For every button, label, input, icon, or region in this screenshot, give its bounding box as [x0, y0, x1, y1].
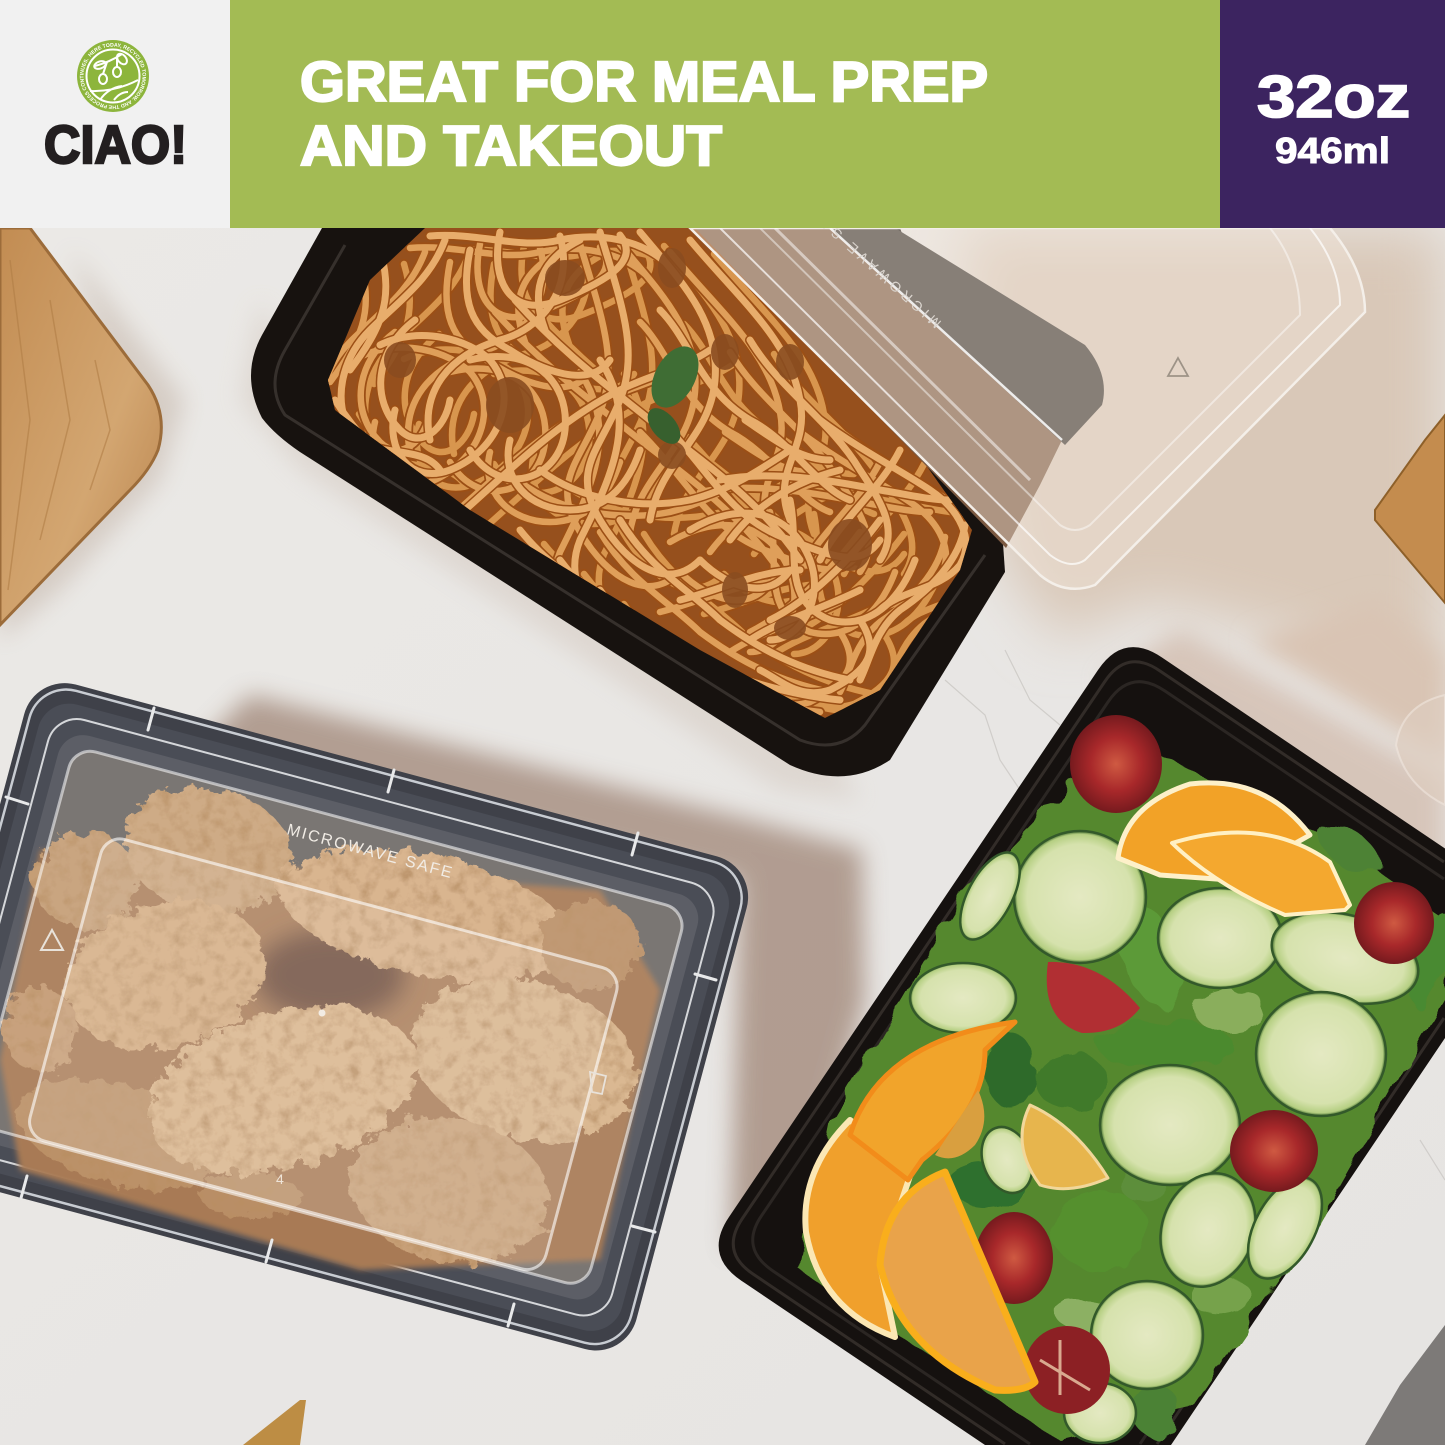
header band [0, 0, 1445, 228]
lid embossed text: MICROWAVE SAFE [285, 821, 454, 882]
heading line 1: GREAT FOR MEAL PREP [300, 50, 988, 114]
brand wordmark: CIAO! [44, 115, 187, 175]
tomato halves [975, 715, 1434, 1414]
clear lid [0, 708, 716, 1326]
mint leaves [648, 346, 698, 444]
rim clips [6, 708, 716, 1326]
black tray [719, 647, 1445, 1445]
clear cup at right edge [1396, 695, 1445, 805]
spaghetti [315, 228, 990, 718]
pasta seen through lid [695, 228, 1062, 548]
recycle mark [41, 930, 63, 950]
mould number: 4 [276, 1171, 284, 1187]
grey cloth [1365, 1325, 1445, 1445]
panel: headline [230, 0, 1220, 228]
recycle mark on lid [1168, 358, 1188, 376]
gold knife handle [243, 1400, 306, 1445]
heading line 2: AND TAKEOUT [300, 114, 722, 178]
panel: logo [0, 0, 230, 228]
dark tray under lid [830, 228, 1104, 445]
container: fried chicken [0, 674, 758, 1360]
container: salad [719, 647, 1445, 1445]
panel: capacity [1220, 0, 1445, 228]
black tray [251, 228, 1005, 776]
orange slices [805, 783, 1350, 1390]
centre mark [318, 1010, 326, 1016]
icon: circular badge [77, 40, 149, 112]
wooden cutting board [0, 228, 161, 625]
olive branch [90, 52, 138, 100]
capacity in millilitres: 946ml [1275, 130, 1390, 171]
tray and rim [0, 674, 758, 1360]
marble table background [0, 228, 1445, 1243]
clear lid [690, 198, 1365, 589]
container: spaghetti [251, 198, 1365, 776]
capacity in ounces: 32oz [1257, 64, 1410, 130]
badge slogan: HERE TODAY, RECYCLED TOMORROW. AND THE PROCESS CONTINUES. [80, 43, 146, 110]
fried chicken pieces [0, 772, 660, 1281]
lettuce base [800, 735, 1445, 1440]
lid embossed text: MICROWAVE SAFE [798, 198, 944, 332]
cup mark [590, 1072, 606, 1094]
wooden box at right edge [1375, 415, 1445, 603]
cucumber slices [910, 831, 1429, 1443]
